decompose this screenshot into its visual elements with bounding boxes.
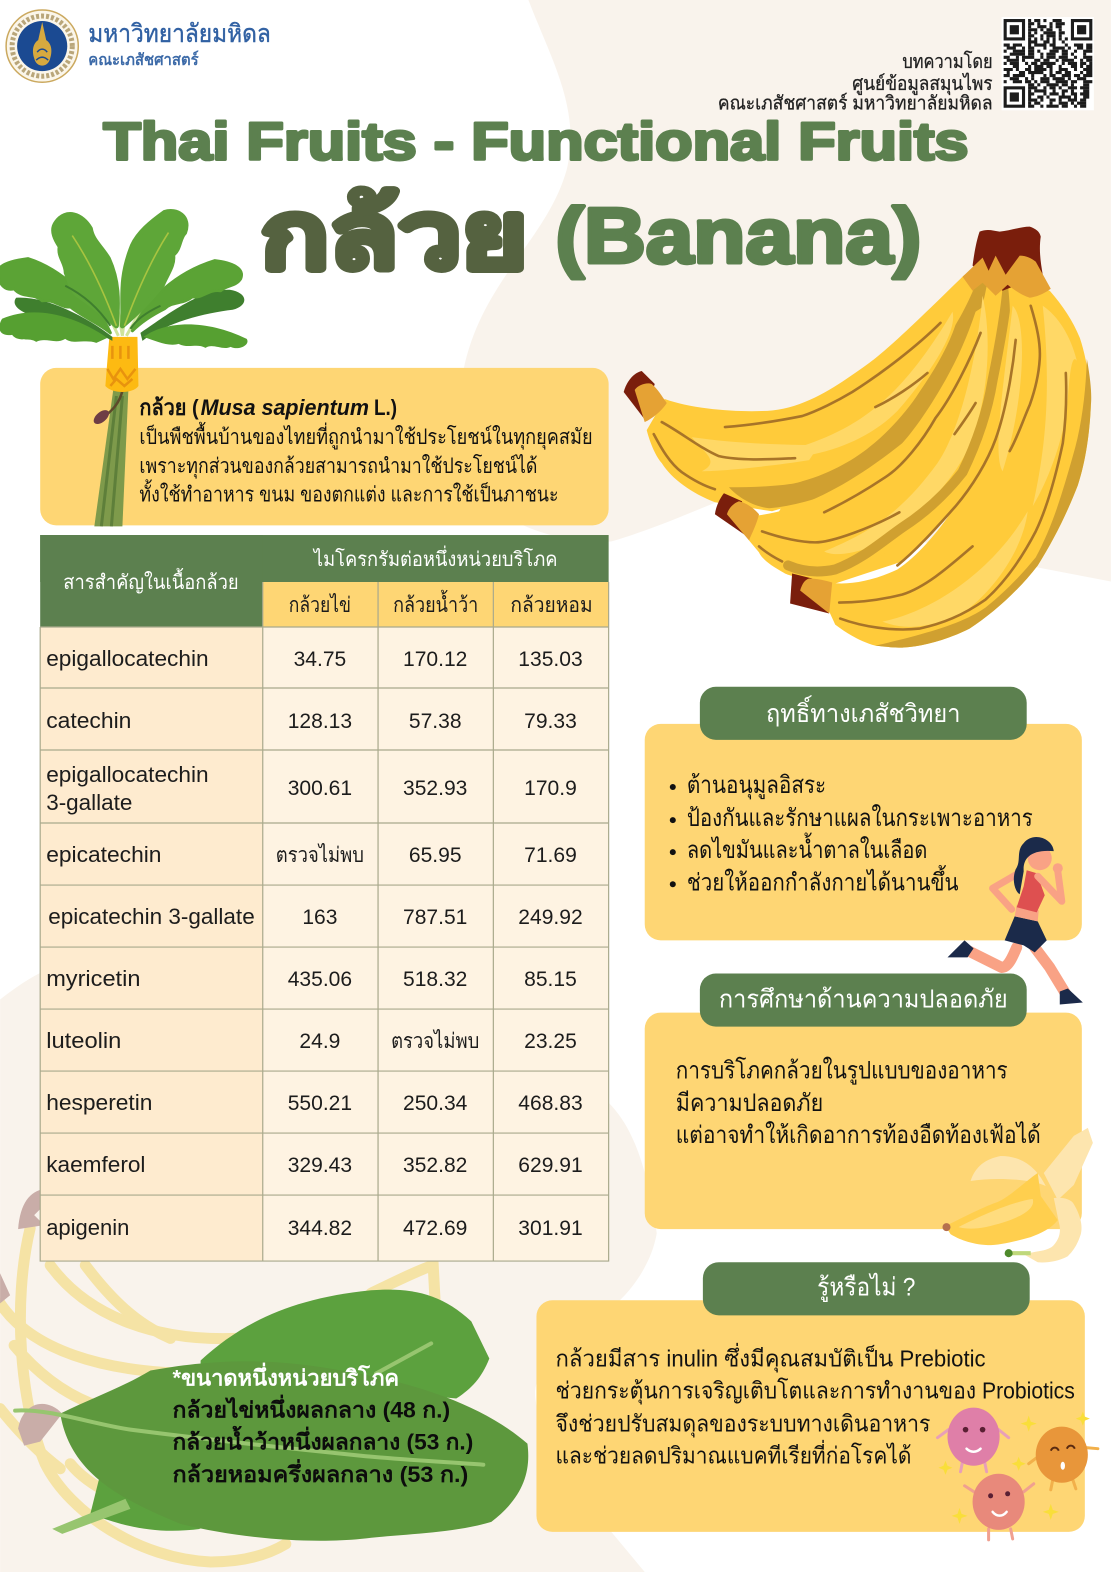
heading: safety: การศึกษาด้านความปลอดภัย: [719, 986, 1008, 1014]
logo wordmark: มหาวิทยาลัยมหิดล: [88, 20, 271, 48]
table body: hesperetin: [46, 1090, 152, 1115]
heading: safety: [700, 973, 1027, 1027]
table body: 135.03: [518, 648, 583, 671]
heading: Thai name: กล้วย: [261, 185, 527, 288]
intro panel: [40, 368, 609, 525]
table body: 128.13: [288, 710, 352, 733]
table header: ไมโครกรัมต่อหนึ่งหน่วยบริโภค: [312, 545, 558, 571]
intro text: Musa sapientum: [201, 395, 369, 420]
front stem: [790, 573, 832, 614]
table body: luteolin: [46, 1028, 121, 1053]
table body: 23.25: [524, 1030, 577, 1053]
table body: 24.9: [299, 1030, 340, 1053]
table body: 57.38: [409, 710, 462, 733]
table body: 85.15: [524, 968, 577, 991]
icon: probiotic characters: [937, 1408, 1098, 1540]
table body: 34.75: [294, 648, 346, 671]
back stem: [624, 371, 667, 422]
intro text: ทั้งใช้ทำอาหาร ขนม ของตกแต่ง และการใช้เป็นภาชนะ: [139, 479, 559, 506]
table body: 629.91: [518, 1154, 583, 1177]
logo wordmark: [88, 20, 271, 69]
table body: 329.43: [288, 1154, 352, 1177]
table body: kaemferol: [46, 1152, 145, 1177]
table body: 300.61: [288, 777, 352, 800]
serving size note: *ขนาดหนึ่งหน่วยบริโภค: [173, 1362, 399, 1391]
table body: 301.91: [518, 1217, 583, 1240]
intro text: [139, 395, 593, 506]
table body: epigallocatechin: [46, 762, 209, 787]
effects list: [670, 772, 1033, 896]
intro text: กล้วย (: [139, 395, 199, 420]
serving size note: [173, 1362, 473, 1487]
top crown: [963, 227, 1051, 298]
table body: 787.51: [403, 906, 467, 929]
intro text: เพราะทุกส่วนของกล้วยสามารถนำมาใช้ประโยชน์ได้: [139, 454, 537, 479]
did you know text: จึงช่วยปรับสมดุลของระบบทางเดินอาหาร: [556, 1411, 930, 1438]
safety text: มีความปลอดภัย: [676, 1090, 823, 1117]
table body: 344.82: [288, 1217, 352, 1240]
panel: safety studies: [645, 973, 1082, 1229]
table body: epicatechin 3-gallate: [48, 904, 255, 929]
table body: 3-gallate: [46, 790, 132, 815]
table body: 79.33: [524, 710, 577, 733]
middle banana: [749, 281, 1011, 578]
byline: [718, 50, 993, 114]
icon: banana leaf callout background: [15, 1290, 528, 1541]
safety text: [676, 1057, 1041, 1149]
table header: กล้วยไข่: [289, 593, 351, 617]
title: Thai Fruits - Functional Fruits: [103, 112, 969, 171]
table body: 468.83: [518, 1092, 583, 1115]
intro text: L.): [374, 395, 397, 420]
leaves: [0, 212, 248, 348]
panel: did you know: [536, 1262, 1098, 1540]
background banana outlines: [0, 1189, 435, 1562]
table body: 550.21: [288, 1092, 352, 1115]
heading: did you know: รู้หรือไม่ ?: [817, 1272, 915, 1302]
background blob: upper right: [462, 0, 1111, 581]
safety text: แต่อาจทำให้เกิดอาการท้องอืดท้องเฟ้อได้: [676, 1121, 1041, 1149]
serving size note: กล้วยหอมครึ่งผลกลาง (53 ก.): [173, 1458, 468, 1487]
table body: 170.12: [403, 648, 467, 671]
table body: 250.34: [403, 1092, 468, 1115]
heading: effects: ฤทธิ์ทางเภสัชวิทยา: [766, 695, 961, 728]
table header: กล้วยน้ำว้า: [393, 590, 478, 617]
table body: 518.32: [403, 968, 467, 991]
table body: ตรวจไม่พบ: [276, 843, 364, 867]
table body: 352.82: [403, 1154, 467, 1177]
table body: epigallocatechin: [46, 646, 209, 671]
effects list: ลดไขมันและน้ำตาลในเลือด: [687, 832, 927, 864]
QR code: [1002, 17, 1094, 110]
table header: กล้วยหอม: [510, 594, 593, 617]
table body: 472.69: [403, 1217, 467, 1240]
icon: runner: [947, 837, 1083, 1005]
front banana: [829, 283, 1091, 648]
did you know text: และช่วยลดปริมาณแบคทีเรียที่ก่อโรคได้: [556, 1440, 911, 1469]
table body: 71.69: [524, 844, 577, 867]
panel: pharmacological effects: [645, 687, 1082, 940]
background blob: lower left: [0, 955, 657, 1572]
table body: [40, 582, 609, 1261]
table body: 435.06: [288, 968, 352, 991]
byline: บทความโดย: [902, 50, 993, 73]
bunch base: [759, 277, 1023, 585]
serving size note: กล้วยน้ำว้าหนึ่งผลกลาง (53 ก.): [173, 1425, 473, 1455]
icon: banana tree: [0, 212, 248, 526]
serving size note: กล้วยไข่หนึ่งผลกลาง (48 ก.): [173, 1394, 450, 1423]
table body: 249.92: [518, 906, 583, 929]
table body: 352.93: [403, 777, 467, 800]
did you know text: ช่วยกระตุ้นการเจริญเติบโตและการทำงานของ Probiotics: [556, 1378, 1075, 1405]
effects list: ช่วยให้ออกกำลังกายได้นานขึ้น: [687, 864, 959, 896]
effects list: ต้านอนุมูลอิสระ: [687, 772, 826, 800]
heading: effects: [700, 687, 1027, 740]
intro text: เป็นพืชพื้นบ้านของไทยที่ถูกนำมาใช้ประโยชน์ในทุกยุคสมัย: [139, 422, 593, 450]
effects list: ป้องกันและรักษาแผลในกระเพาะอาหาร: [687, 804, 1033, 832]
logo wordmark: คณะเภสัชศาสตร์: [88, 50, 199, 69]
did you know text: กล้วยมีสาร inulin ซึ่งมีคุณสมบัติเป็น Prebiotic: [556, 1342, 986, 1372]
table body: epicatechin: [46, 842, 161, 867]
heading: English name: (Banana): [556, 192, 921, 280]
icon: peeled banana: [942, 1128, 1093, 1262]
table header: สารสำคัญในเนื้อกล้วย: [63, 568, 239, 594]
table body: catechin: [46, 708, 131, 733]
middle stem: [715, 493, 759, 540]
table body: ตรวจไม่พบ: [391, 1029, 479, 1053]
table: [40, 535, 609, 1261]
safety text: การบริโภคกล้วยในรูปแบบของอาหาร: [676, 1057, 1008, 1086]
heading: did you know: [703, 1262, 1030, 1315]
logo: Mahidol University: [6, 10, 78, 82]
table header: [40, 535, 609, 627]
banana tips: [0, 1189, 62, 1446]
table body: 65.95: [409, 844, 462, 867]
byline: ศูนย์ข้อมูลสมุนไพร: [852, 72, 993, 96]
table body: myricetin: [46, 966, 140, 991]
table body: 163: [302, 906, 337, 929]
table body: apigenin: [46, 1215, 129, 1240]
did you know text: [556, 1342, 1075, 1469]
table body: 170.9: [524, 777, 577, 800]
icon: big banana bunch: [624, 227, 1091, 648]
back banana: [647, 275, 1003, 511]
byline: คณะเภสัชศาสตร์ มหาวิทยาลัยมหิดล: [718, 92, 993, 114]
